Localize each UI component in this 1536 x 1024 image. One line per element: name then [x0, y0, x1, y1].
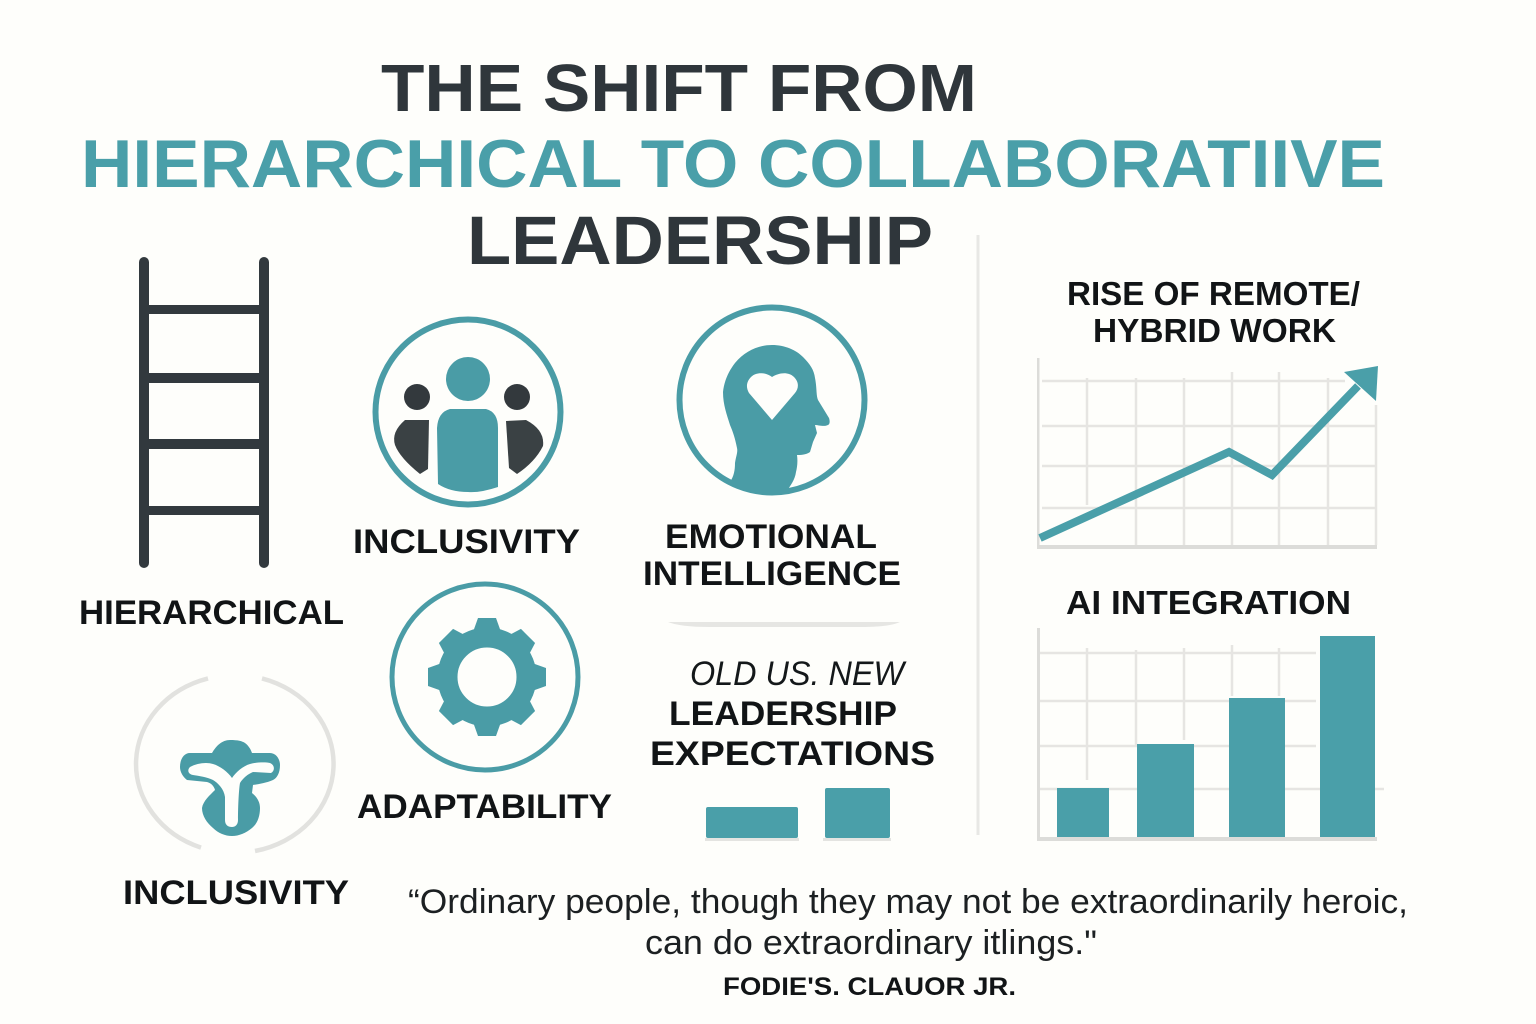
heading: ai integration: AI INTEGRATION [1066, 584, 1351, 621]
icon: emotional intelligence head [680, 308, 864, 492]
label: emotional intelligence [643, 518, 901, 593]
title [81, 51, 1385, 279]
heading: remote hybrid work [1067, 275, 1360, 349]
chart: old vs new bars [705, 788, 891, 841]
heading: old vs new: LEADERSHIP [669, 695, 897, 733]
label: inclusivity second: INCLUSIVITY [123, 874, 349, 912]
label: inclusivity: INCLUSIVITY [353, 523, 580, 561]
divider: vertical [976, 235, 980, 835]
label: adaptability: ADAPTABILITY [357, 788, 612, 826]
icon: ladder [139, 257, 269, 568]
icon: adaptability gear [392, 584, 578, 770]
title: THE SHIFT FROM [381, 51, 977, 126]
quote attribution: FODIE'S. CLAUOR JR. [723, 973, 1016, 1001]
chart: remote work line [1037, 358, 1378, 549]
heading: old vs new [650, 655, 935, 773]
heading: old vs new: EXPECTATIONS [650, 735, 935, 773]
title: HIERARCHICAL TO COLLABORATIIVE [81, 126, 1385, 202]
label: hierarchical: HIERARCHICAL [79, 594, 344, 632]
chart: ai integration bars [1037, 628, 1384, 841]
heading: remote hybrid work: HYBRID WORK [1093, 312, 1336, 349]
icon: inclusivity group [376, 320, 560, 504]
heading: old vs new: OLD US. NEW [690, 655, 907, 693]
label: emotional intelligence: EMOTIONAL [665, 518, 877, 556]
quote [408, 883, 1408, 962]
label: emotional intelligence: INTELLIGENCE [643, 555, 901, 593]
divider: center [668, 622, 900, 627]
quote: “Ordinary people, though they may not be extraordinarily heroic, [408, 883, 1408, 921]
heading: remote hybrid work: RISE OF REMOTE/ [1067, 275, 1360, 312]
quote: can do extraordinary itlings." [645, 924, 1097, 962]
icon: faded circle with Y symbol [136, 678, 334, 851]
title: LEADERSHIP [467, 202, 933, 279]
